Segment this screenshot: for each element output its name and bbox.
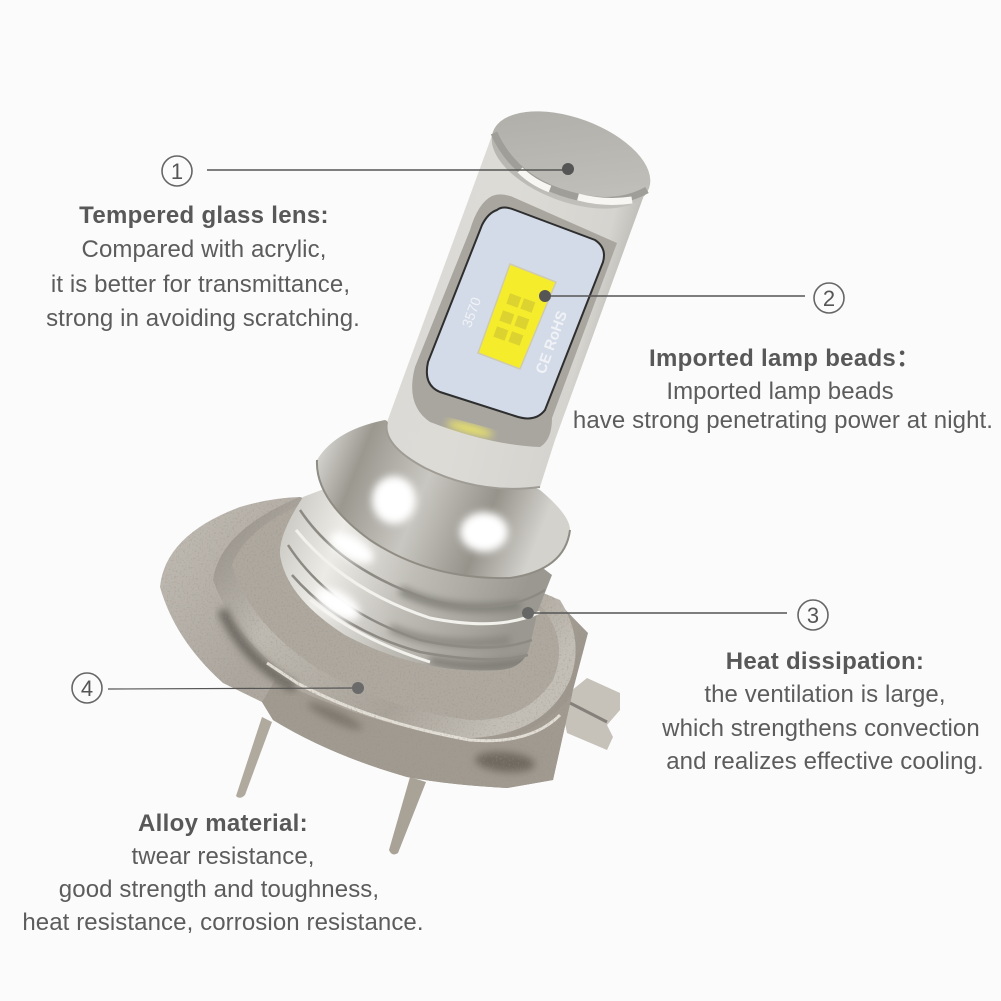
infographic canvas bbox=[24, 111, 991, 933]
ring shadow bbox=[222, 610, 295, 688]
number 1: 1 bbox=[171, 159, 183, 184]
text block: tempered glass lens: strong in avoiding scratching. bbox=[46, 305, 360, 332]
neck cylinder bbox=[386, 130, 647, 489]
leader line 2 bbox=[539, 290, 805, 302]
number 4 bbox=[72, 673, 102, 703]
yellow LED chip bbox=[478, 264, 556, 369]
number 3 bbox=[798, 600, 828, 630]
locating tab bbox=[560, 678, 620, 750]
text block: heat dissipation: which strengthens convection bbox=[661, 715, 980, 742]
leader line 3 bbox=[522, 607, 787, 619]
callout 2 bbox=[539, 283, 993, 434]
text block: heat dissipation: the ventilation is large, bbox=[704, 681, 946, 708]
illustration: H7 LED bulb bbox=[150, 92, 663, 854]
text block: alloy material: twear resistance, bbox=[131, 843, 315, 870]
flange lower lip bbox=[262, 680, 572, 788]
lamp window bbox=[412, 194, 617, 447]
LED reflection bbox=[446, 418, 494, 440]
text block: tempered glass lens: Tempered glass lens: bbox=[79, 202, 329, 229]
text block: tempered glass lens bbox=[46, 202, 360, 332]
fin dark bands bbox=[390, 590, 530, 666]
text block: tempered glass lens: it is better for transmittance, bbox=[51, 271, 350, 298]
callout 3 bbox=[522, 600, 984, 775]
text block: heat dissipation: and realizes effective cooling. bbox=[666, 748, 984, 775]
base flange bbox=[160, 497, 588, 788]
bell highlights bbox=[372, 476, 508, 552]
number 2 bbox=[814, 283, 844, 313]
text block: alloy material: good strength and toughness, bbox=[59, 876, 379, 903]
board labels: 3570 bbox=[458, 295, 484, 330]
text block: alloy material bbox=[22, 810, 424, 936]
lens cap bbox=[479, 92, 663, 228]
text block: heat dissipation bbox=[661, 648, 984, 775]
callout 1 bbox=[46, 156, 574, 332]
text block: alloy material: Alloy material: bbox=[138, 810, 308, 837]
ring ridge highlight bbox=[267, 663, 560, 741]
callout 4 bbox=[22, 673, 424, 936]
number 3: 3 bbox=[807, 603, 819, 628]
text block: imported lamp beads: Imported lamp beads bbox=[666, 378, 894, 405]
text block: imported lamp beads bbox=[573, 345, 993, 434]
leader line 4 bbox=[108, 682, 364, 694]
text block: imported lamp beads: Imported lamp beads： bbox=[649, 345, 920, 372]
number 2: 2 bbox=[823, 286, 835, 311]
number 4: 4 bbox=[81, 676, 93, 701]
text block: heat dissipation: Heat dissipation: bbox=[726, 648, 924, 675]
pin right bbox=[389, 777, 426, 854]
pin left bbox=[236, 717, 272, 798]
text block: alloy material: heat resistance, corrosion resistance. bbox=[22, 909, 424, 936]
raised ring bbox=[213, 497, 576, 738]
bell housing bbox=[317, 420, 570, 578]
text block: tempered glass lens: Compared with acrylic, bbox=[82, 236, 326, 263]
circuit board bbox=[427, 208, 604, 418]
heat sink fins bbox=[280, 460, 552, 671]
illustration: H7 LED bulb: CE RoHS bbox=[533, 309, 571, 376]
number 1 bbox=[162, 156, 192, 186]
LED cells bbox=[493, 293, 535, 346]
fin highlights bbox=[311, 526, 378, 626]
metal speckle bbox=[162, 498, 577, 770]
leader line 1 bbox=[207, 163, 574, 175]
lip shadows bbox=[305, 698, 536, 775]
text block: imported lamp beads: have strong penetrating power at night. bbox=[573, 407, 993, 434]
